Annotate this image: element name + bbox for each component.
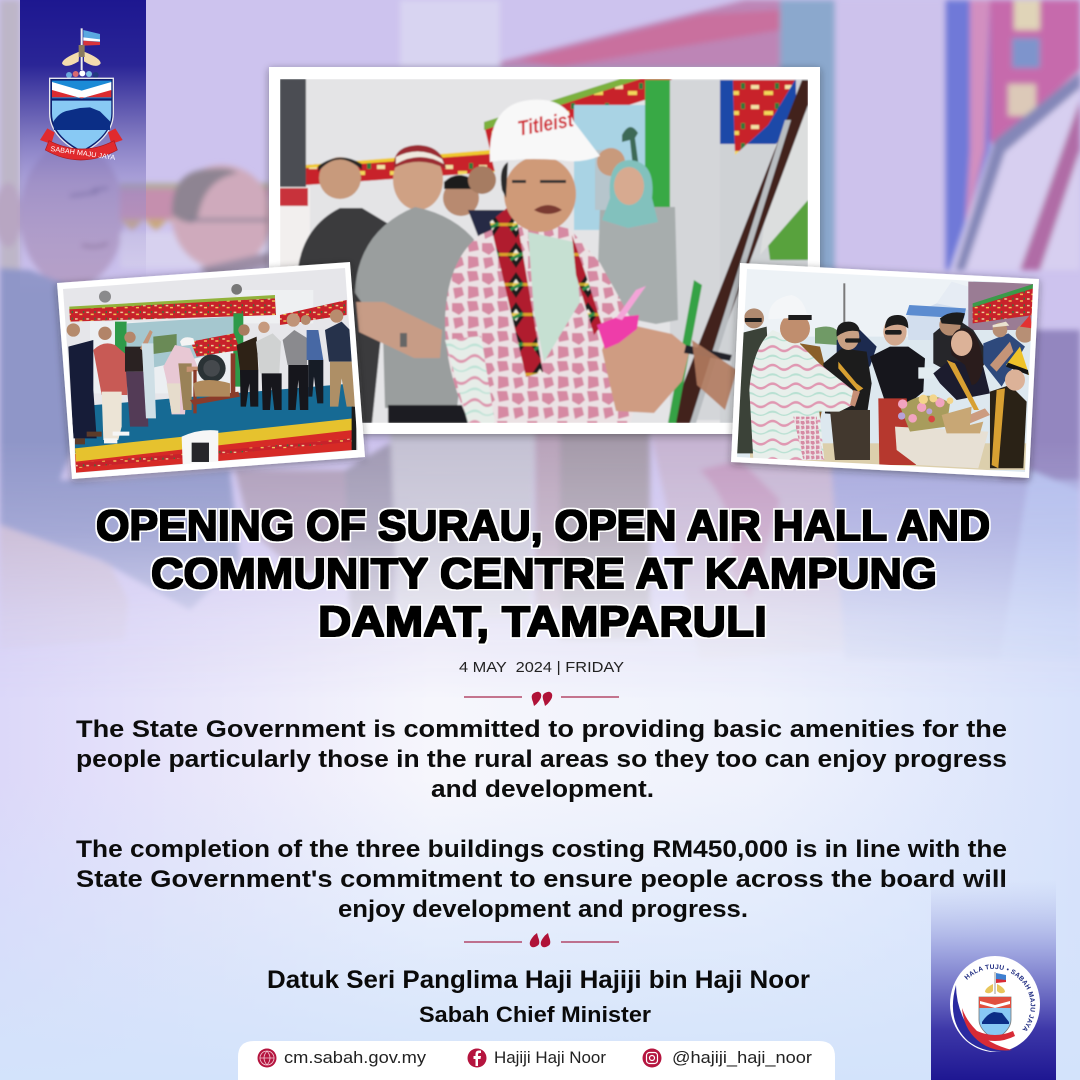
cap logo: Titleist (516, 108, 576, 141)
left photo: gong ceremony (63, 268, 358, 473)
shirt of left man (0, 268, 240, 610)
website icon (258, 1048, 276, 1068)
woman in hijab (598, 207, 678, 324)
main man face and cap (504, 156, 576, 232)
bald man (172, 165, 272, 269)
quote paragraph one: people particularly those in the rural areas so they too can enjoy progress (76, 746, 1007, 773)
title (96, 502, 990, 646)
divider: opening quote (464, 692, 619, 706)
Hala Tuju circular logo: HALA TUJU • SABAH MAJU JAYA (964, 964, 1036, 1031)
footer contact panel (238, 1041, 835, 1080)
divider: closing quote (464, 933, 619, 947)
left man (0, 184, 20, 246)
quote paragraph two: The completion of the three buildings costing RM450,000 is in line with the (76, 836, 1007, 863)
title: DAMAT, TAMPARULI (318, 598, 767, 646)
Sabah state emblem (40, 28, 123, 162)
left photo frame (52, 262, 370, 486)
instagram text: @hajiji_haji_noor (672, 1049, 813, 1067)
main man shirt (444, 224, 630, 423)
main man in batik (749, 330, 856, 460)
main photo (280, 79, 808, 423)
right photo frame (726, 260, 1044, 485)
ribbon on wall (120, 183, 270, 189)
speaker name: Datuk Seri Panglima Haji Hajiji bin Haji Noor (267, 966, 810, 994)
people (67, 309, 356, 464)
instagram icon (642, 1048, 662, 1068)
quote paragraph one: The State Government is committed to providing basic amenities for the (76, 716, 1007, 743)
quote paragraph two: State Government's commitment to ensure people across the board will (76, 866, 1007, 893)
Hala Tuju circular logo (950, 956, 1040, 1052)
facebook icon (468, 1048, 486, 1068)
pink ribbon (597, 315, 639, 349)
bottom-right navy banner (931, 880, 1056, 1080)
website text: cm.sabah.gov.my (284, 1049, 427, 1067)
right photo: greeting women (737, 269, 1033, 472)
main photo frame (269, 67, 820, 434)
speaker role: Sabah Chief Minister (419, 1002, 651, 1027)
quote paragraph two: enjoy development and progress. (338, 896, 748, 923)
top-left navy banner (20, 0, 146, 295)
title: OPENING OF SURAU, OPEN AIR HALL AND (96, 502, 990, 550)
people behind (319, 157, 361, 199)
quote paragraph one (76, 716, 1007, 803)
date: 4 MAY 2024 | FRIDAY (459, 659, 624, 676)
Sabah state emblem: SABAH MAJU JAYA (50, 146, 116, 162)
crowd (737, 327, 770, 453)
facebook text: Hajiji Haji Noor (494, 1049, 607, 1067)
hand holding marker (602, 326, 690, 413)
quote paragraph two (76, 836, 1007, 923)
flowers, basket and lace table (895, 427, 988, 468)
quote paragraph one: and development. (431, 776, 654, 803)
title: COMMUNITY CENTRE AT KAMPUNG (151, 550, 937, 598)
